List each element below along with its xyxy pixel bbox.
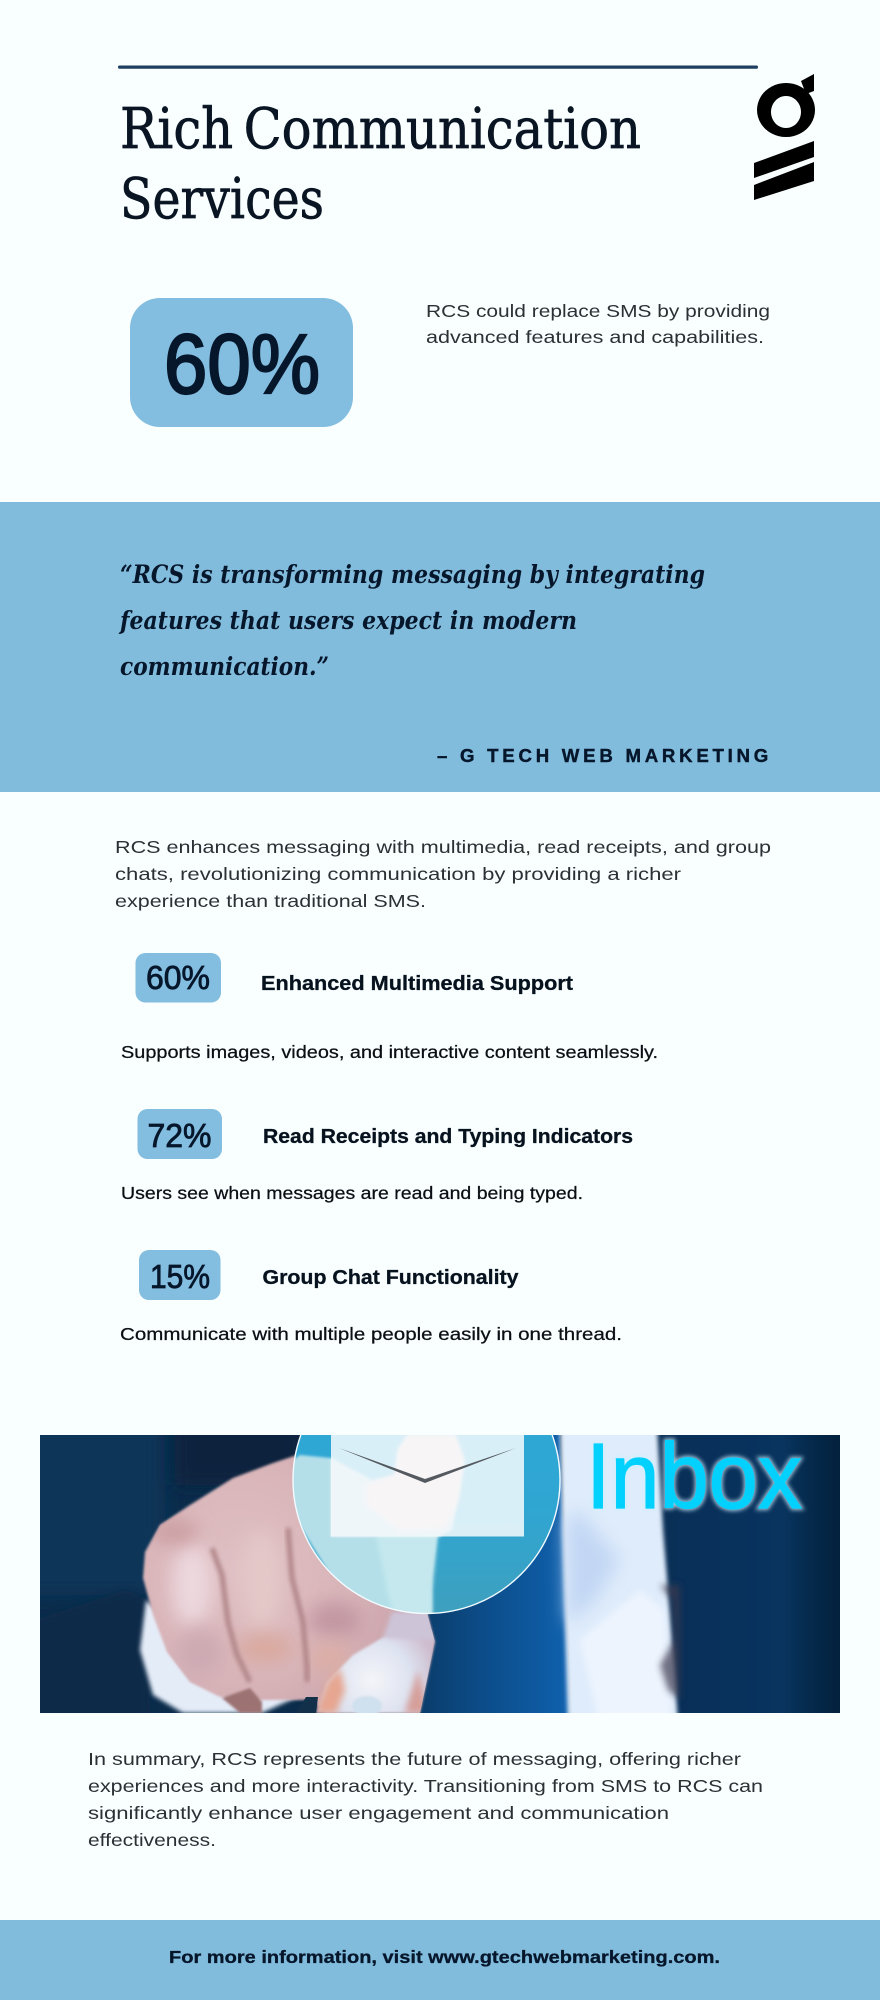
body paragraph (115, 837, 771, 911)
gaps under the fingers (222, 1688, 262, 1713)
knuckle shading (172, 1543, 212, 1627)
shirt (560, 1425, 678, 1725)
feature description: Communicate with multiple people easily in one thread. (120, 1324, 622, 1344)
photo: hand pressing inbox envelope (40, 1435, 840, 1713)
title: Services (120, 167, 324, 232)
tie (410, 1435, 570, 1713)
summary paragraph: significantly enhance user engagement and communication (88, 1803, 669, 1823)
quote text: “RCS is transforming messaging by integrating (120, 560, 705, 589)
hand behind glass (290, 1455, 438, 1620)
header rule (118, 66, 758, 69)
feature description: Users see when messages are read and being typed. (121, 1183, 583, 1203)
feature heading: Group Chat Functionality (262, 1267, 519, 1289)
icon: G Tech logo (754, 74, 815, 200)
stat badge: 60% (136, 953, 221, 1002)
right jacket (650, 1435, 840, 1713)
title (120, 97, 641, 232)
feature heading: Enhanced Multimedia Support (261, 973, 573, 995)
thumb (316, 1630, 436, 1713)
stat badge: 60%: 60% (146, 959, 210, 996)
envelope flap (339, 1448, 516, 1483)
finger on envelope (330, 1457, 457, 1538)
feature heading: Read Receipts and Typing Indicators (263, 1126, 633, 1148)
feature description: Supports images, videos, and interactive content seamlessly. (121, 1042, 658, 1062)
body paragraph: RCS enhances messaging with multimedia, read receipts, and group (115, 837, 771, 857)
feature: group chat (120, 1250, 622, 1344)
stat badge: 15% (139, 1250, 220, 1300)
stat badge: 72% (138, 1109, 222, 1159)
stat badge: 15%: 15% (150, 1258, 210, 1295)
intro text: RCS could replace SMS by providing (426, 301, 770, 321)
feature: read receipts (121, 1109, 633, 1203)
intro text (426, 301, 770, 347)
shirt cuff (140, 1600, 308, 1713)
stat badge: 60% (130, 298, 353, 427)
feature: multimedia support (121, 953, 658, 1062)
summary paragraph: effectiveness. (88, 1830, 216, 1850)
hand (143, 1455, 435, 1713)
inbox label: Inbox (586, 1424, 802, 1528)
footer text: For more information, visit www.gtechwebmarketing.com. (169, 1947, 720, 1967)
summary paragraph: experiences and more interactivity. Transitioning from SMS to RCS can (88, 1776, 763, 1796)
panel: quote band (0, 502, 880, 792)
envelope (331, 1435, 524, 1536)
panel: footer band (0, 1920, 880, 2000)
title: Rich Communication (120, 97, 641, 162)
summary paragraph (88, 1749, 763, 1850)
summary paragraph: In summary, RCS represents the future of messaging, offering richer (88, 1749, 741, 1769)
body paragraph: experience than traditional SMS. (115, 891, 426, 911)
inbox label: Inbox (586, 1424, 802, 1528)
stat badge: 60%: 60% (164, 317, 320, 411)
quote attribution: – G TECH WEB MARKETING (437, 746, 772, 766)
intro text: advanced features and capabilities. (426, 327, 764, 347)
quote text (118, 560, 705, 681)
quote text: communication.” (120, 652, 329, 681)
glass disc with envelope (294, 1435, 560, 1613)
stat badge: 72%: 72% (148, 1117, 212, 1154)
body paragraph: chats, revolutionizing communication by providing a richer (115, 864, 681, 884)
quote text: features that users expect in modern (118, 606, 577, 635)
